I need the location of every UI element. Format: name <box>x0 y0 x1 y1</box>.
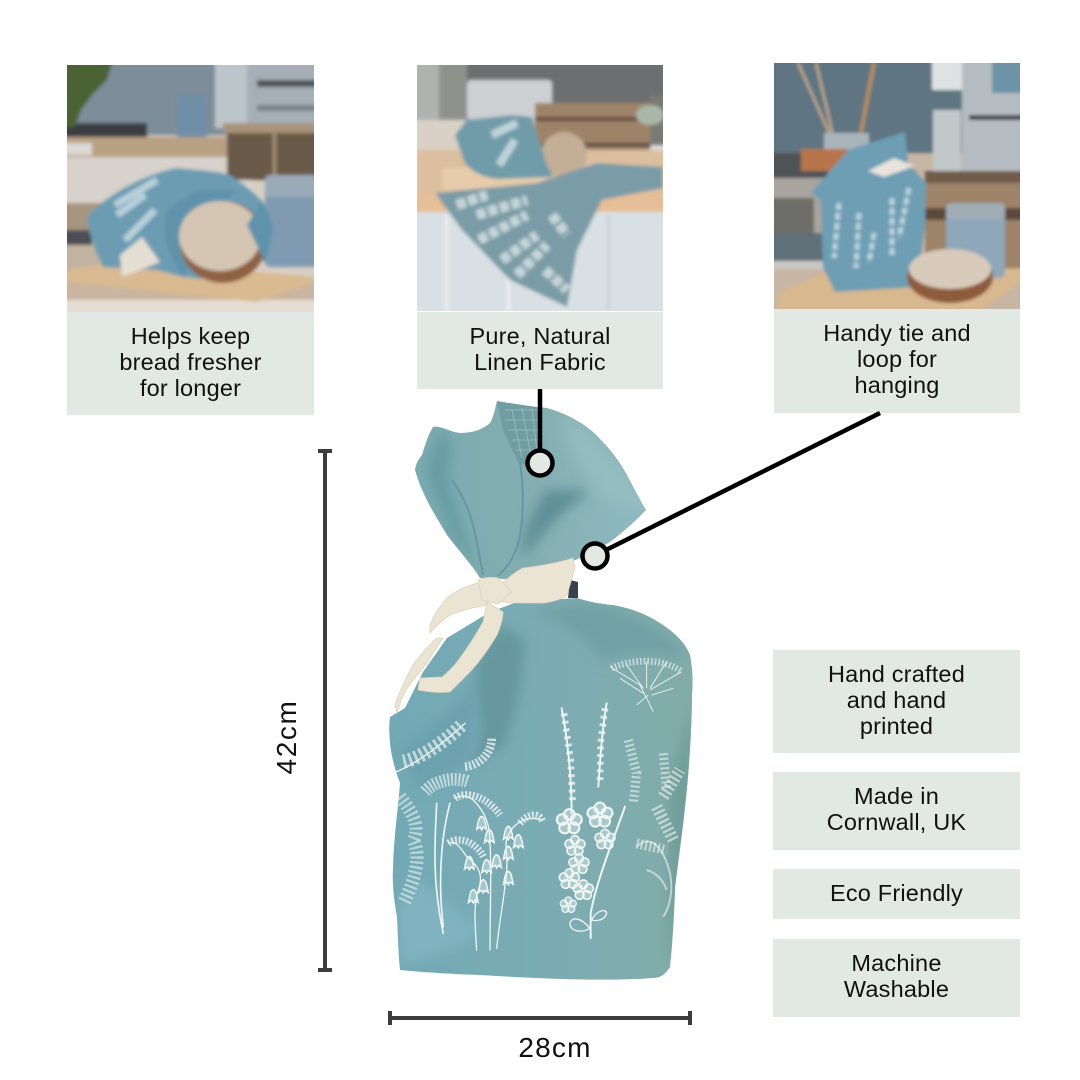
top right umbel print <box>610 661 682 712</box>
hollyhock stems and flowers <box>557 703 625 938</box>
white botanical print <box>397 703 680 950</box>
photo: bread in linen bag on board <box>67 65 314 312</box>
bag body <box>385 595 697 985</box>
caption: fresher bread: Helps keep <box>131 323 250 349</box>
feature: made in Cornwall: Made in <box>854 783 939 809</box>
feature: made in Cornwall <box>773 772 1020 850</box>
caption: fresher bread <box>67 312 314 415</box>
callout: linen fabric pointer <box>528 389 552 476</box>
feature: made in Cornwall: Cornwall, UK <box>827 809 966 835</box>
feature: hand crafted <box>773 650 1020 753</box>
cream tie <box>395 558 575 713</box>
feature: machine washable: Washable <box>844 976 949 1002</box>
lily of the valley <box>448 795 543 950</box>
feature: machine washable: Machine <box>851 950 942 976</box>
dark loop behind tie <box>568 580 578 598</box>
caption: fresher bread: bread fresher <box>119 349 262 375</box>
height dimension bracket <box>318 451 332 970</box>
feature: hand crafted: and hand <box>847 687 946 713</box>
feature: hand crafted: printed <box>860 713 933 739</box>
callout: tie pointer <box>582 413 880 568</box>
feature: eco friendly: Eco Friendly <box>830 880 963 906</box>
width label: 28cm <box>518 1032 592 1063</box>
feature: machine washable <box>773 939 1020 1017</box>
caption: tie and loop: loop for <box>857 346 937 372</box>
faded right side print <box>628 740 680 917</box>
photo: bag with tie and loop beside bread <box>774 63 1020 309</box>
caption: natural linen: Linen Fabric <box>474 349 606 375</box>
left edge feathery print <box>400 797 417 903</box>
caption: tie and loop: hanging <box>854 372 940 398</box>
caption: tie and loop <box>774 309 1020 413</box>
caption: fresher bread: for longer <box>140 375 241 401</box>
caption: tie and loop: Handy tie and <box>823 320 971 346</box>
leaf and umbel cluster <box>425 738 492 933</box>
fern sprig <box>397 723 465 772</box>
linen bread bag photo illustration <box>385 398 697 985</box>
caption: natural linen: Pure, Natural <box>469 323 611 349</box>
photo: linen fabric draped over counter <box>417 65 663 311</box>
gathered top frill of bag <box>410 398 650 583</box>
width dimension bracket <box>390 1011 690 1025</box>
feature: eco friendly <box>773 869 1020 919</box>
height label: 42cm <box>271 700 302 774</box>
feature: hand crafted: Hand crafted <box>828 661 965 687</box>
caption: natural linen <box>417 312 663 389</box>
